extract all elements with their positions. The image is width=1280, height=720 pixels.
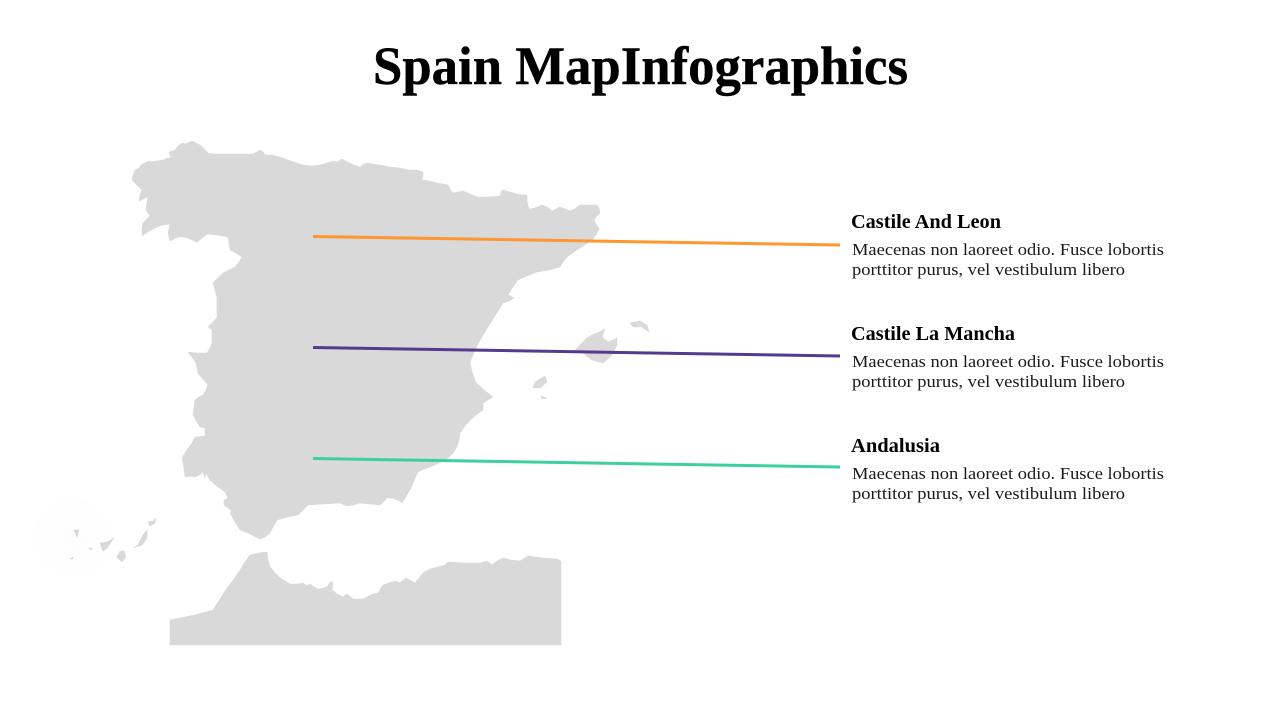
label: Castile La Mancha: Maecenas non laoreet odio. Fusce lobortis xyxy=(852,352,1164,371)
line: Andalusia xyxy=(313,458,840,467)
label: Castile And Leon: porttitor purus, vel vestibulum libero xyxy=(852,260,1125,279)
Menorca xyxy=(630,321,649,332)
glow behind Canary Islands xyxy=(27,492,119,584)
line: Castile And Leon xyxy=(313,236,840,245)
label: Andalusia: Maecenas non laoreet odio. Fusce lobortis xyxy=(852,464,1164,483)
label: Castile And Leon xyxy=(851,211,1164,279)
label: Andalusia: Andalusia xyxy=(851,435,940,457)
Ibiza xyxy=(533,376,547,388)
label: Castile La Mancha: porttitor purus, vel vestibulum libero xyxy=(852,372,1125,391)
mainland Spain xyxy=(132,141,600,539)
Mallorca xyxy=(575,329,617,363)
label: Castile And Leon: Castile And Leon xyxy=(851,211,1002,233)
Formentera xyxy=(541,396,547,399)
title: Spain MapInfographics xyxy=(373,36,908,96)
label: Castile And Leon: Maecenas non laoreet odio. Fusce lobortis xyxy=(852,240,1164,259)
label: Andalusia: porttitor purus, vel vestibulum libero xyxy=(852,484,1125,503)
line: Castile La Mancha xyxy=(313,348,840,356)
map of Spain xyxy=(27,141,649,645)
Canary Islands xyxy=(70,518,156,562)
Morocco and north Africa xyxy=(170,552,561,645)
label: Castile La Mancha: Castile La Mancha xyxy=(851,323,1015,345)
label: Andalusia xyxy=(851,435,1164,503)
label: Castile La Mancha xyxy=(851,323,1164,391)
